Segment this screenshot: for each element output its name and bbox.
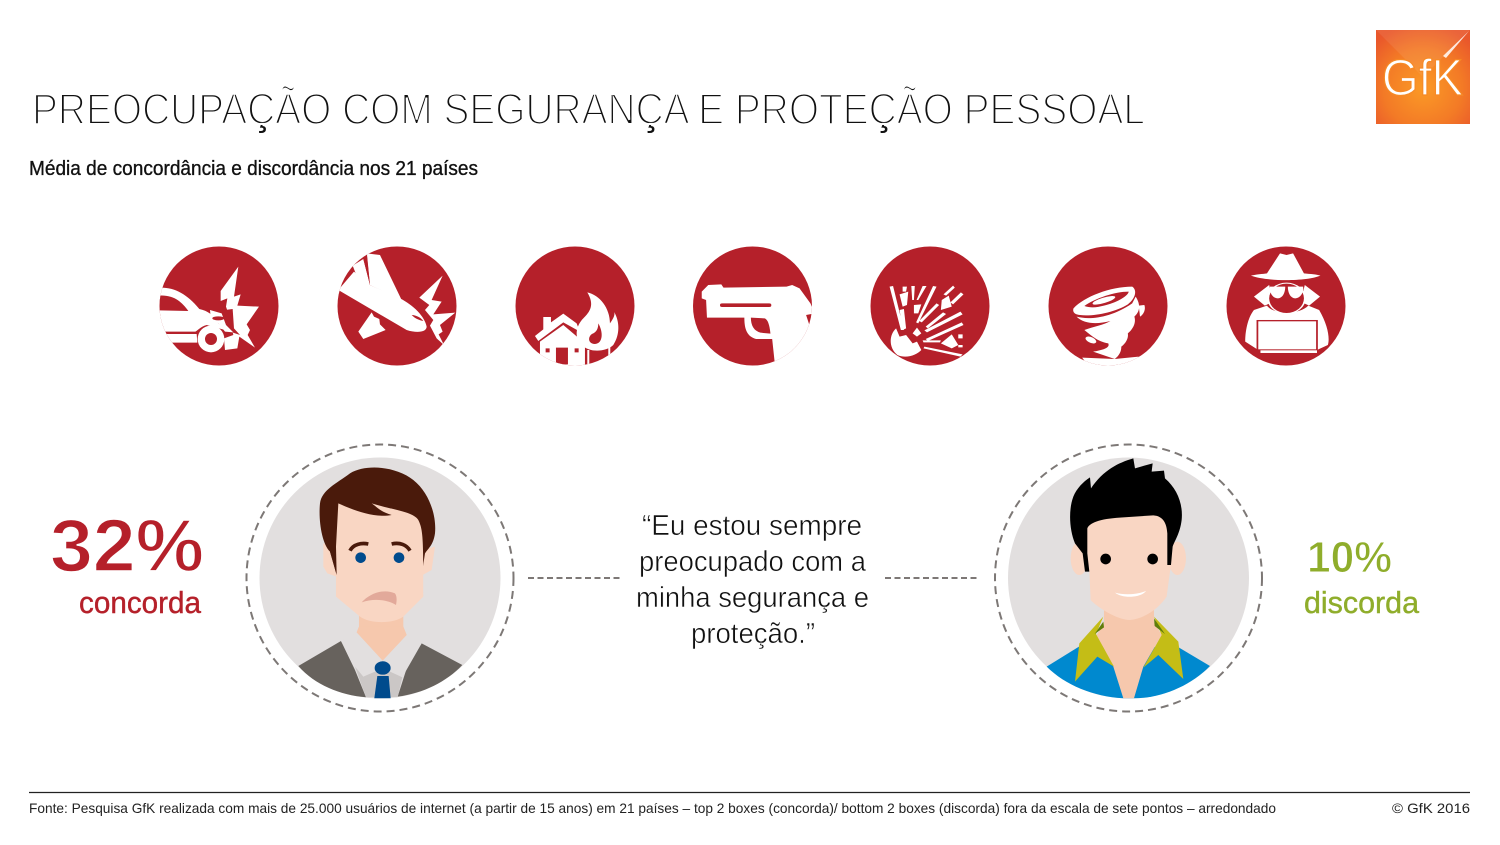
illustration: smiling man bbox=[995, 444, 1262, 712]
icon: explosion bbox=[870, 246, 990, 366]
icon: hacker bbox=[1226, 246, 1346, 366]
footer rule bbox=[29, 792, 1470, 794]
icon: house on fire bbox=[516, 246, 634, 367]
subtitle: Média de concordância e discordância nos 21 países bbox=[29, 158, 478, 180]
quote: proteção.” bbox=[691, 618, 815, 650]
quote bbox=[636, 510, 869, 650]
copyright: © GfK 2016 bbox=[1392, 800, 1470, 816]
logo: GfK bbox=[1376, 30, 1470, 124]
icon: plane crash bbox=[338, 246, 456, 366]
connector left bbox=[528, 577, 620, 579]
connector right bbox=[885, 577, 977, 579]
stat: 32% agree: 32% bbox=[50, 504, 204, 587]
quote: “Eu estou sempre bbox=[642, 510, 862, 542]
icon: tornado bbox=[1048, 246, 1168, 367]
quote: minha segurança e bbox=[636, 582, 869, 614]
logo: GfK: GfK bbox=[1382, 49, 1463, 106]
illustration: worried man bbox=[246, 444, 514, 712]
title: PREOCUPAÇÃO COM SEGURANÇA E PROTEÇÃO PESSOAL bbox=[32, 84, 1145, 134]
icon: gun bbox=[693, 246, 815, 366]
stat: 10% disagree bbox=[1304, 533, 1420, 620]
quote: preocupado com a bbox=[639, 546, 867, 578]
source note: Fonte: Pesquisa GfK realizada com mais de 25.000 usuários de internet (a partir de 15 anos) em 21 países – top 2 boxes (concorda)/ bottom 2 boxes (discorda) fora da escala de sete pontos – arredondado bbox=[29, 800, 1276, 816]
stat: 32% agree bbox=[50, 504, 204, 620]
stat: 32% agree: concorda bbox=[79, 585, 202, 620]
stat: 10% disagree: discorda bbox=[1304, 585, 1420, 620]
stat: 10% disagree: 10% bbox=[1307, 533, 1392, 582]
icon: car crash bbox=[158, 246, 278, 366]
